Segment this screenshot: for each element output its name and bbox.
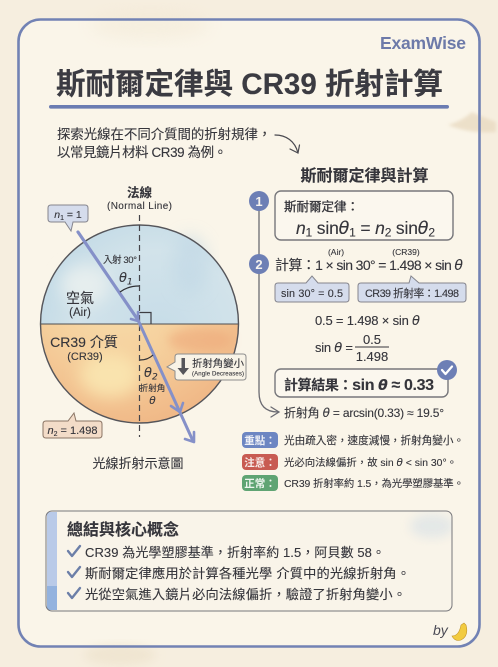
incidence label: 1	[127, 278, 133, 288]
note: key point	[242, 432, 464, 448]
summary heading: 總結與核心概念	[67, 520, 179, 539]
law box: 1	[349, 226, 356, 240]
title: 斯耐爾定律與 CR39 折射計算	[56, 68, 443, 101]
equation steps: 0.5	[363, 332, 381, 347]
incidence label: 入射 30°	[103, 254, 137, 266]
step badge 1	[249, 191, 269, 211]
law box: =	[356, 218, 375, 238]
calculation line: (Air)	[328, 247, 344, 257]
heading: law and calculation: 斯耐爾定律與計算	[300, 166, 429, 185]
air label	[66, 290, 94, 319]
note: normal: 正常：	[244, 477, 276, 490]
note: caution: 光必向法線偏折，故 sin θ < sin 30°。	[284, 456, 457, 469]
law box: n	[296, 218, 306, 238]
equation steps: 1.498	[356, 349, 388, 364]
CR39 label	[50, 334, 118, 363]
step badge 2	[249, 254, 269, 274]
incidence label	[103, 254, 137, 288]
summary item 1: CR39 為光學塑膠基準，折射率約 1.5，阿貝數 58。	[85, 545, 385, 560]
law box	[275, 191, 453, 240]
intro text	[57, 127, 271, 160]
step badge 1: 1	[255, 194, 263, 209]
CR39 half of circle	[41, 324, 238, 422]
refraction angle label: θ	[149, 395, 156, 407]
icon: banana	[452, 623, 467, 640]
refraction angle label: θ	[144, 366, 152, 381]
right angle mark	[140, 312, 151, 324]
law box: θ	[339, 219, 350, 239]
callout: n2	[43, 413, 102, 438]
intro text: 探索光線在不同介質間的折射規律，	[57, 127, 271, 142]
refraction angle label: 折射角	[140, 382, 165, 393]
law box: 2	[385, 226, 392, 240]
step badge 2: 2	[255, 257, 263, 272]
callout: sin 30: sin 30° = 0.5	[281, 288, 343, 300]
CR39 label: CR39 介質	[50, 334, 118, 350]
refraction angle label: 2	[152, 372, 158, 382]
incidence label: θ	[119, 271, 127, 286]
angle arcs	[120, 286, 139, 292]
summary item 2: 斯耐爾定律應用於計算各種光學 介質中的光線折射角。	[85, 565, 410, 581]
normal line label: 法線	[127, 185, 152, 200]
CR39 label: (CR39)	[67, 351, 103, 363]
callout: angle decreases	[167, 354, 246, 380]
equation steps: sin θ =	[315, 340, 353, 356]
calculation line: 計算：1 × sin 30° = 1.498 × sin θ	[275, 257, 463, 274]
equation steps: 0.5 = 1.498 × sin θ	[315, 313, 420, 329]
result box: 計算結果：sin θ ≈ 0.33	[284, 377, 434, 394]
normal line	[138, 215, 140, 437]
equation steps	[315, 313, 420, 364]
calculation line: (CR39)	[392, 247, 420, 257]
arrow: intro to calculation	[275, 135, 300, 153]
interface line	[41, 323, 238, 325]
circle outline	[40, 225, 238, 423]
law box: 斯耐爾定律：	[284, 199, 359, 214]
note: key point: 重點：	[244, 434, 276, 447]
law box: sin	[391, 218, 418, 238]
note: normal: CR39 折射率約 1.5，為光學塑膠基準。	[284, 477, 464, 490]
law box: n	[375, 218, 385, 238]
diagram: refraction	[40, 185, 246, 471]
note: caution: 注意：	[244, 456, 276, 469]
callout: n1	[48, 205, 88, 231]
signature: by	[433, 622, 449, 638]
law box: 2	[428, 226, 435, 240]
brand: ExamWise: ExamWise	[380, 33, 466, 53]
callout: n2: = 1.498	[57, 425, 98, 437]
callout: n1: n	[54, 209, 60, 221]
air label: (Air)	[69, 307, 91, 319]
law box: 1	[306, 226, 313, 240]
result box	[275, 369, 448, 397]
calculation line	[275, 247, 463, 274]
callout: angle decreases: 折射角變小	[192, 357, 245, 370]
icon: result check badge	[437, 360, 457, 380]
normal line label	[107, 185, 172, 212]
callout: CR39 index	[358, 276, 466, 302]
callout: n2: n	[47, 425, 54, 437]
note: key point: 光由疏入密，速度減慢，折射角變小。	[284, 434, 464, 447]
panel: summary	[46, 511, 454, 611]
timeline connector	[259, 210, 279, 417]
refraction angle label	[140, 366, 165, 407]
callout: n1: = 1	[64, 209, 82, 221]
callout: n1: 1	[60, 215, 64, 222]
air label: 空氣	[66, 290, 94, 306]
callout: CR39 index: CR39 折射率：1.498	[365, 286, 459, 300]
diagram caption: 光線折射示意圖	[92, 456, 184, 471]
normal line label: (Normal Line)	[107, 201, 172, 212]
note: normal	[242, 475, 464, 491]
signature	[433, 622, 467, 640]
final angle: 折射角 θ = arcsin(0.33) ≈ 19.5°	[284, 405, 444, 420]
law box: sin	[312, 218, 339, 238]
note: caution	[242, 454, 457, 470]
callout: angle decreases: (Angle Decreases)	[192, 372, 244, 378]
summary item 3: 光從空氣進入鏡片必向法線偏折，驗證了折射角變小。	[85, 586, 406, 602]
light ray	[78, 232, 194, 442]
callout: sin 30	[275, 276, 349, 302]
intro text: 以常見鏡片材料 CR39 為例。	[57, 145, 227, 160]
law box: θ	[418, 219, 429, 239]
callout: n2: 2	[54, 431, 58, 438]
air half of circle	[41, 226, 238, 324]
title underline	[49, 105, 449, 109]
